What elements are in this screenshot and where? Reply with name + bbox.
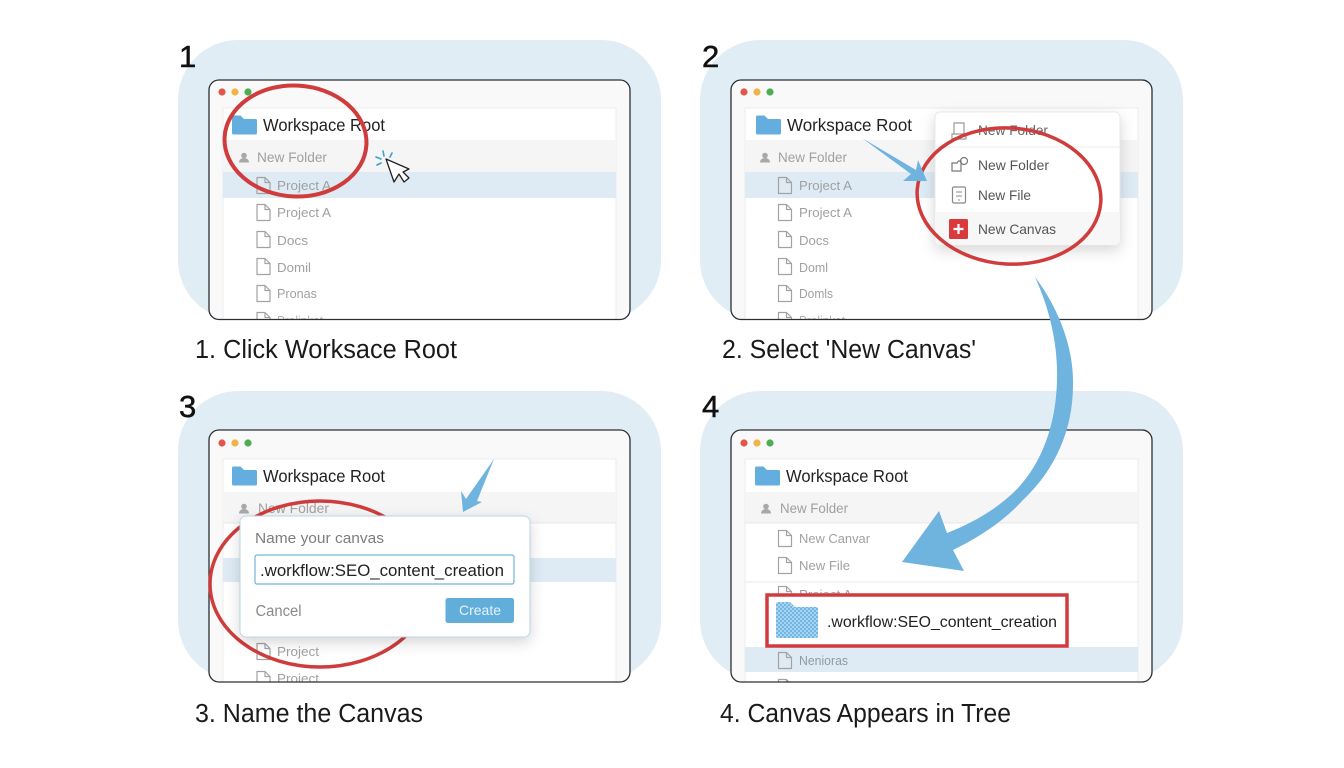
window: step 2 file tree: Project A bbox=[799, 205, 852, 220]
window: step 2 file tree: Doml bbox=[799, 260, 828, 275]
window: step 1 file tree: Prolinket bbox=[277, 313, 323, 328]
step number 1: 1 bbox=[179, 39, 196, 74]
context menu: New File bbox=[978, 187, 1031, 203]
dialog: name your canvas: .workflow:SEO_content_creation bbox=[260, 561, 504, 580]
dialog: name your canvas: Cancel bbox=[256, 603, 302, 620]
highlight: red box around new canvas bbox=[767, 595, 1067, 646]
highlight: red circle around workspace root bbox=[222, 82, 369, 200]
window: step 2 file tree: Domls bbox=[799, 286, 833, 301]
step number 3: 3 bbox=[179, 389, 196, 424]
window: step 3 file tree: Project bbox=[277, 671, 319, 686]
window: step 4 file tree bbox=[731, 430, 1152, 696]
icon: cursor with click sparks bbox=[376, 151, 409, 182]
window: step 4 file tree: Workspace Root bbox=[786, 466, 908, 486]
window: step 3 file tree: New Folder bbox=[258, 501, 330, 516]
window: step 4 file tree: Nenioras bbox=[799, 653, 848, 668]
panel: step 3 background bbox=[178, 391, 661, 680]
window: step 2 file tree: Workspace Root bbox=[787, 115, 912, 135]
infographic: four step canvas creation guide bbox=[178, 40, 1183, 728]
window: step 4 file tree: New File bbox=[799, 558, 850, 573]
dialog: name your canvas: Create bbox=[459, 602, 501, 618]
window: step 1 file tree: Workspace Root bbox=[263, 115, 385, 135]
context menu: New Canvas bbox=[978, 221, 1056, 237]
window: step 1 file tree: Pronas bbox=[277, 286, 317, 301]
highlight: red circle around menu items bbox=[912, 122, 1106, 270]
panel: step 4 background bbox=[700, 391, 1183, 680]
caption: step 3: 3. Name the Canvas bbox=[195, 700, 423, 728]
arrow: large curved arrow from step 2 to step 4 bbox=[902, 277, 1073, 571]
window: step 3 file tree: Project bbox=[277, 644, 319, 659]
step number 2: 2 bbox=[702, 39, 719, 74]
window: step 1 file tree: Docs bbox=[277, 233, 309, 248]
caption: step 1: 1. Click Worksace Root bbox=[195, 336, 457, 364]
window: step 1 file tree bbox=[209, 80, 630, 328]
context menu bbox=[935, 112, 1120, 245]
window: step 1 file tree: Project A bbox=[277, 178, 331, 193]
window: step 2 file tree bbox=[731, 80, 1152, 328]
context menu: New Folder bbox=[978, 123, 1049, 138]
window: step 3 file tree bbox=[209, 430, 630, 688]
arrow: pointing to context menu bbox=[862, 138, 927, 181]
dialog: name your canvas bbox=[240, 516, 530, 637]
window: step 1 file tree: Domil bbox=[277, 260, 311, 275]
caption: step 2: 2. Select 'New Canvas' bbox=[722, 336, 976, 364]
caption: step 4: 4. Canvas Appears in Tree bbox=[720, 700, 1011, 728]
icon: hatched canvas folder bbox=[776, 602, 818, 638]
panel: step 2 background bbox=[700, 40, 1183, 320]
window: step 2 file tree: New Folder bbox=[778, 150, 847, 165]
window: step 4 file tree: New Folder bbox=[780, 501, 848, 516]
dialog: name your canvas: Name your canvas bbox=[255, 531, 384, 547]
panel: step 1 background bbox=[178, 40, 661, 320]
window: step 1 file tree: Project A bbox=[277, 205, 331, 220]
window: step 3 file tree: Workspace Root bbox=[263, 466, 385, 486]
window: step 2 file tree: Docs bbox=[799, 233, 829, 248]
window: step 1 file tree: New Folder bbox=[257, 150, 328, 165]
step number 4: 4 bbox=[702, 389, 719, 424]
context menu: New Folder bbox=[978, 157, 1049, 173]
highlight: red circle around dialog bbox=[210, 501, 430, 667]
window: step 4 file tree: New Canvar bbox=[799, 531, 871, 546]
arrow: pointing to dialog bbox=[461, 459, 494, 512]
highlight: red box around new canvas: .workflow:SEO_content_creation bbox=[827, 614, 1057, 631]
window: step 2 file tree: Project A bbox=[799, 178, 852, 193]
window: step 4 file tree: Project A bbox=[799, 587, 852, 602]
window: step 2 file tree: Prolinket bbox=[799, 313, 845, 328]
